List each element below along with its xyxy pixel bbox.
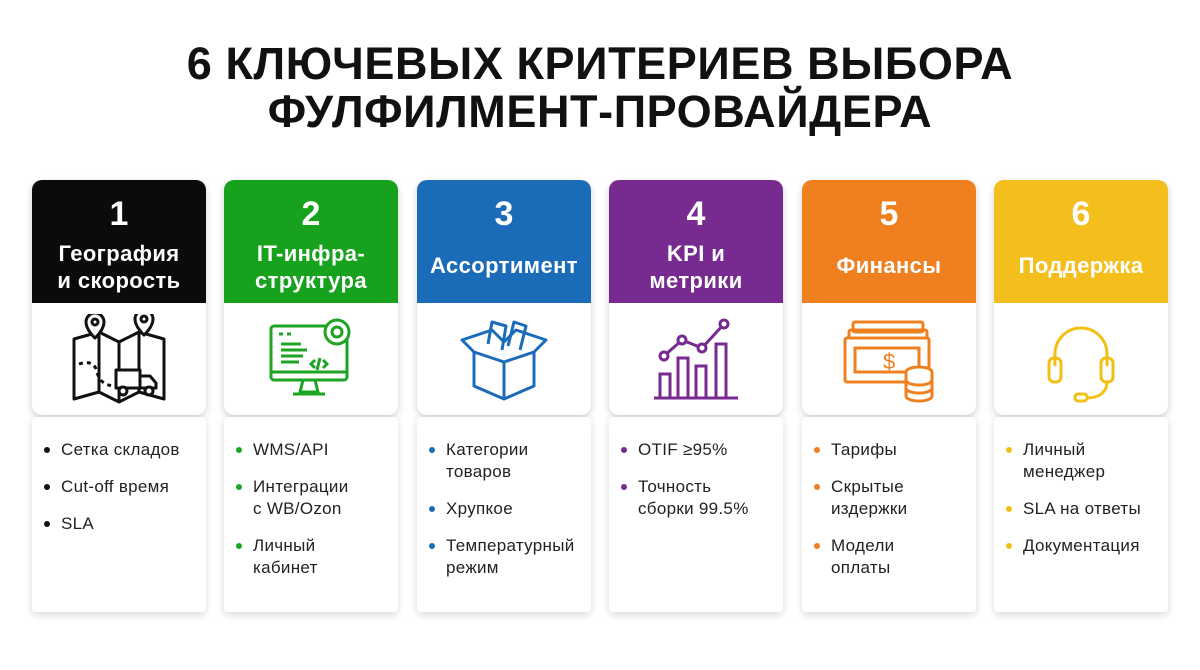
icon: money — [844, 320, 934, 402]
list 4: OTIF ≥95% — [638, 440, 728, 459]
card 3: Ассортимент — [430, 253, 578, 278]
card 1: 1 — [110, 195, 128, 233]
list 1 — [32, 417, 206, 612]
list 1: Сетка складов — [61, 440, 180, 459]
list 1: SLA — [61, 514, 94, 533]
list 2: Личный — [253, 536, 315, 555]
card 2 — [224, 180, 398, 415]
card 6: 6 — [1072, 195, 1090, 233]
card 4 — [609, 180, 783, 415]
list 3: Хрупкое — [446, 499, 513, 518]
list 3: режим — [446, 558, 499, 577]
list 4: сборки 99.5% — [638, 499, 749, 518]
list 3 — [417, 417, 591, 612]
list 3: товаров — [446, 462, 511, 481]
card 6: Поддержка — [1019, 253, 1143, 278]
list 2: с WB/Ozon — [253, 499, 342, 518]
card 2: структура — [255, 268, 367, 293]
card 4: KPI и — [667, 241, 725, 266]
list 4: Точность — [638, 477, 711, 496]
icon: money: $ — [883, 349, 895, 374]
list 6: менеджер — [1023, 462, 1105, 481]
list 5: оплаты — [831, 558, 890, 577]
title: 6 КЛЮЧЕВЫХ КРИТЕРИЕВ ВЫБОРА — [187, 38, 1013, 89]
card 2: 2 — [302, 195, 320, 233]
card 4: метрики — [649, 268, 743, 293]
card 1 — [32, 180, 206, 415]
list 6 — [994, 417, 1168, 612]
icon: headset — [1048, 326, 1114, 402]
card 1: География — [58, 241, 180, 266]
icon: chart — [654, 318, 738, 400]
list 2: Интеграции — [253, 477, 348, 496]
icon: box — [460, 320, 548, 400]
title — [187, 38, 1013, 137]
card 5 — [802, 180, 976, 415]
card 5: 5 — [880, 195, 898, 233]
list 4 — [609, 417, 783, 612]
list 5: Тарифы — [831, 440, 897, 459]
icon: map — [72, 314, 166, 404]
list 3: Категории — [446, 440, 528, 459]
list 1: Cut-off время — [61, 477, 169, 496]
list 6: Личный — [1023, 440, 1085, 459]
card 2: IT-инфра- — [257, 241, 365, 266]
list 3: Температурный — [446, 536, 575, 555]
card 3 — [417, 180, 591, 415]
card 6 — [994, 180, 1168, 415]
list 2: WMS/API — [253, 440, 329, 459]
list 6: SLA на ответы — [1023, 499, 1141, 518]
list 6: Документация — [1023, 536, 1140, 555]
list 2 — [224, 417, 398, 612]
title: ФУЛФИЛМЕНТ-ПРОВАЙДЕРА — [268, 86, 932, 137]
list 5: Скрытые — [831, 477, 904, 496]
list 5: Модели — [831, 536, 894, 555]
card 4: 4 — [687, 195, 705, 233]
card 5: Финансы — [837, 253, 941, 278]
card 3: 3 — [495, 195, 513, 233]
list 5 — [802, 417, 976, 612]
icon: monitor — [270, 318, 350, 396]
list 2: кабинет — [253, 558, 318, 577]
list 5: издержки — [831, 499, 907, 518]
card 1: и скорость — [57, 268, 181, 293]
